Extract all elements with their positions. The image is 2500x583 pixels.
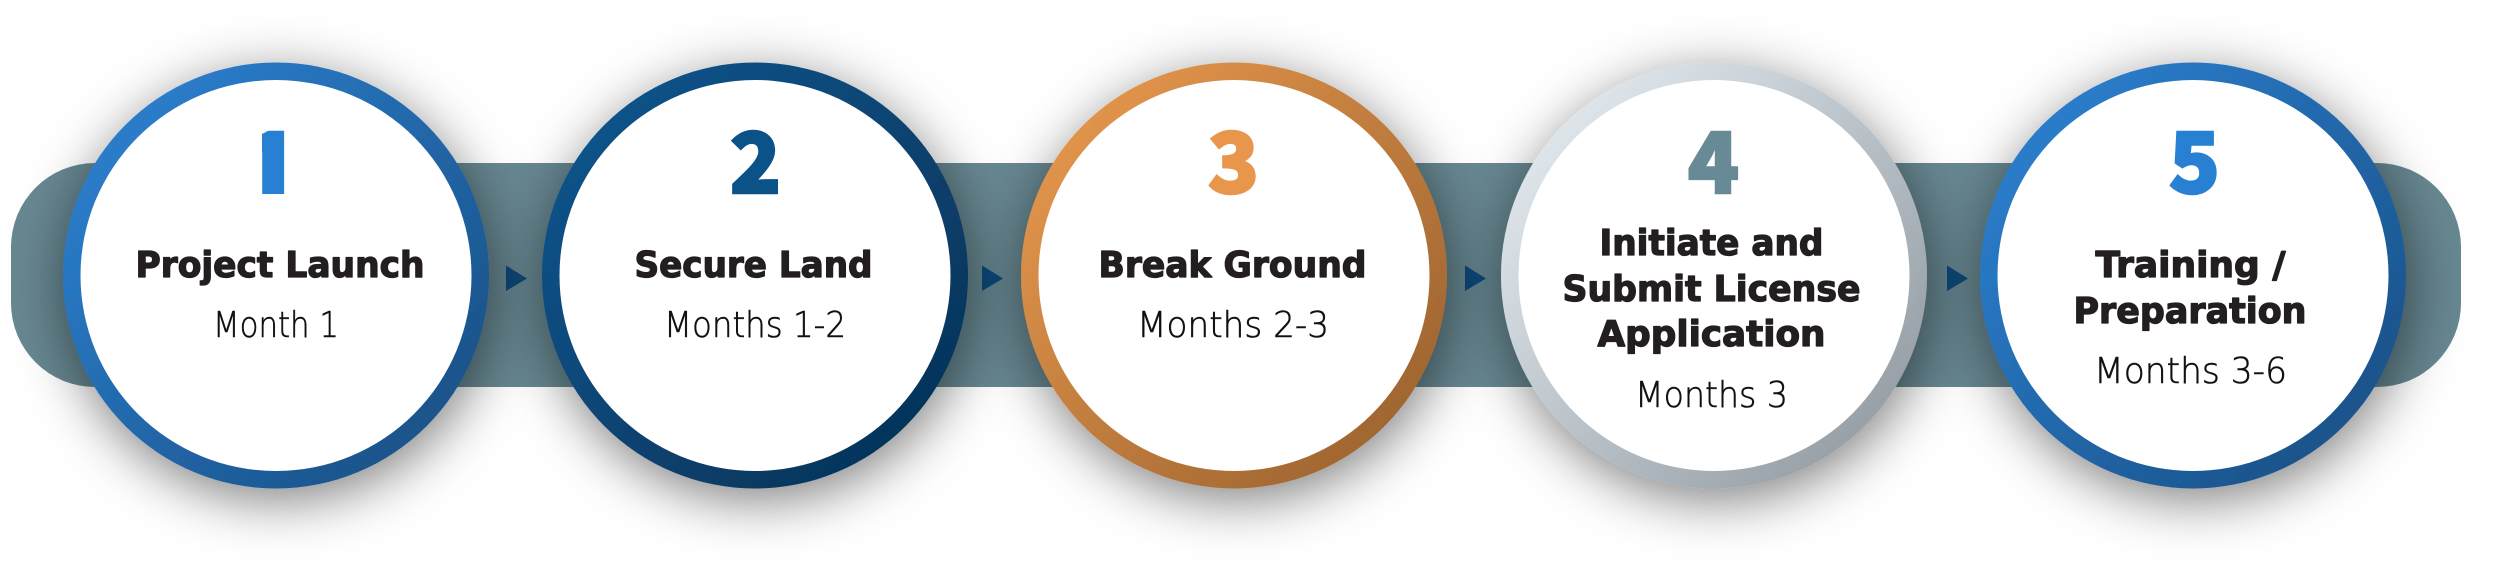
number 5: 5: [2169, 97, 2220, 218]
heading: Training / Preparation: Training /: [2096, 245, 2286, 286]
number 2: 2: [730, 97, 781, 218]
panel: step 3 Break Ground: [1021, 62, 1447, 488]
panel: step 1 Project Launch: [63, 62, 489, 488]
panel: step 2 Secure Land: [542, 62, 968, 488]
arrow 3 to 4: [1465, 266, 1486, 291]
number 1: 1: [238, 86, 304, 243]
heading: Secure Land: Secure Land: [634, 245, 872, 286]
heading: Training / Preparation: Preparation: [2074, 291, 2306, 332]
heading: Initiate and Submit License Application: Application: [1598, 314, 1826, 355]
heading: Training / Preparation: [2074, 245, 2306, 332]
heading: Initiate and Submit License Application: Initiate and: [1600, 223, 1824, 264]
timing: Months 2-3: Months 2-3: [1137, 305, 1329, 346]
arrow 4 to 5: [1947, 266, 1968, 291]
heading: Initiate and Submit License Application: Submit License: [1562, 269, 1860, 310]
arrow 1 to 2: [506, 266, 527, 291]
heading: Project Launch: Project Launch: [136, 245, 424, 286]
timing: Month 1: Month 1: [213, 305, 339, 346]
timing: Months 3: Months 3: [1635, 375, 1788, 416]
heading: Break Ground: Break Ground: [1098, 245, 1366, 286]
heading: Initiate and Submit License Application: [1562, 223, 1860, 355]
connecting band: [11, 163, 2461, 387]
arrow 2 to 3: [982, 266, 1003, 291]
panel: step 4 Initiate and Submit License Application: [1501, 62, 1927, 488]
panel: step 5 Training / Preparation: [1980, 62, 2406, 488]
number 4: 4: [1688, 97, 1739, 218]
timing: Months 1-2: Months 1-2: [664, 305, 846, 346]
number 3: 3: [1208, 97, 1259, 218]
timing: Months 3-6: Months 3-6: [2094, 351, 2287, 392]
